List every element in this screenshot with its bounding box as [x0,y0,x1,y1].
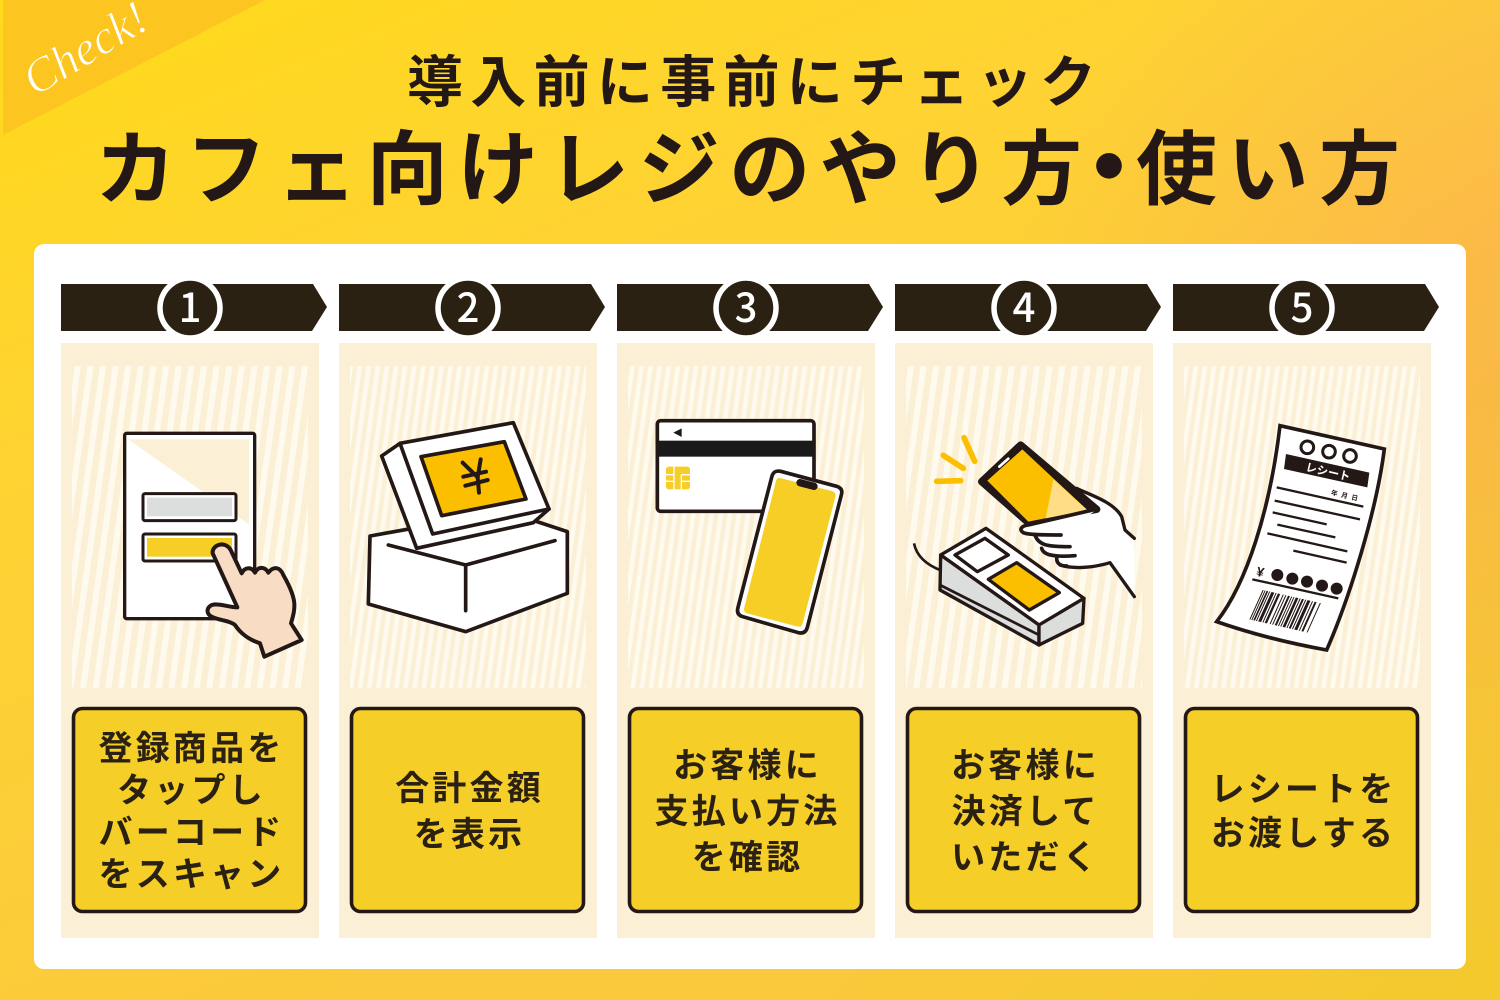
step 5 panel [1173,343,1431,938]
title line 2: 使い方 [1136,126,1411,216]
step 5 caption box: お渡しする [1211,815,1396,853]
step 3 number badge [716,276,776,338]
step 2 arrow header [339,284,605,331]
icon: receipt: レシート [1304,462,1351,484]
step 1 caption box: タップし [117,772,266,810]
icon: form on tablet tapped by a hand [125,433,302,657]
icon: register with yen screen [368,423,567,632]
step 3 panel [617,343,875,938]
step 1 caption box: をスキャン [98,856,284,894]
step 5 striped area [1184,366,1420,688]
step 3 arrow header [617,284,883,331]
step 3 caption box [630,708,862,912]
icon: receipt: 年 月 日 [1330,488,1359,503]
step 5 column [1173,276,1439,938]
step 5 number badge [1272,276,1332,338]
step 4 caption box [908,708,1140,912]
step 3 caption box: 支払い方法 [654,793,840,831]
step 1 striped area [72,366,308,688]
step 3 number badge: 3 [735,276,757,334]
title line 2: カフェ向けレジのやり方 [95,126,1092,216]
step 2 striped area [350,366,586,688]
step 4 arrow header [895,284,1161,331]
icon: receipt [1217,426,1384,650]
title line 2 [95,114,1411,226]
step 3 caption box: お客様に [673,747,822,785]
step 1 panel [61,343,319,938]
white main panel [34,244,1466,969]
step 4 caption box: いただく [951,839,1100,877]
step 5 arrow header [1173,284,1439,331]
step 2 number badge: 2 [457,276,479,334]
step 5 caption box: レシートを [1210,771,1396,809]
step 1 number badge [160,276,220,338]
step 1 arrow header [61,284,327,331]
step 4 striped area [906,366,1142,688]
title line 1: 導入前に事前にチェック [407,51,1103,114]
step 2 number badge [438,276,498,338]
step 5 caption box [1186,708,1418,912]
step 4 column [895,276,1161,938]
step 2 panel [339,343,597,938]
step 4 number badge: 4 [1013,276,1035,334]
step 3 column [617,276,883,938]
step 1 column [61,276,327,938]
step 1 caption box: バーコード [98,814,284,852]
step 4 caption box: お客様に [951,747,1100,785]
step 3 striped area [628,366,864,688]
step 4 number badge [994,276,1054,338]
step 1 caption box: 登録商品を [98,730,284,768]
corner ribbon with Check! [3,0,265,135]
step 1 caption box [74,708,306,912]
icon: smartphone payment over terminal [914,438,1134,645]
step 2 caption box: を表示 [414,816,525,854]
step 1 number badge: 1 [179,276,201,334]
step 3 caption box: を確認 [692,839,803,877]
step 5 number badge: 5 [1291,276,1313,334]
step 2 column [339,276,605,938]
icon: receipt: ¥ [1255,564,1266,580]
icon: credit card and smartphone [657,421,842,633]
title line 2: ・ [1059,114,1159,226]
step 4 caption box: 決済して [952,793,1099,831]
step 4 panel [895,343,1153,938]
step 2 caption box [352,708,584,912]
step 2 caption box: 合計金額 [395,770,544,808]
